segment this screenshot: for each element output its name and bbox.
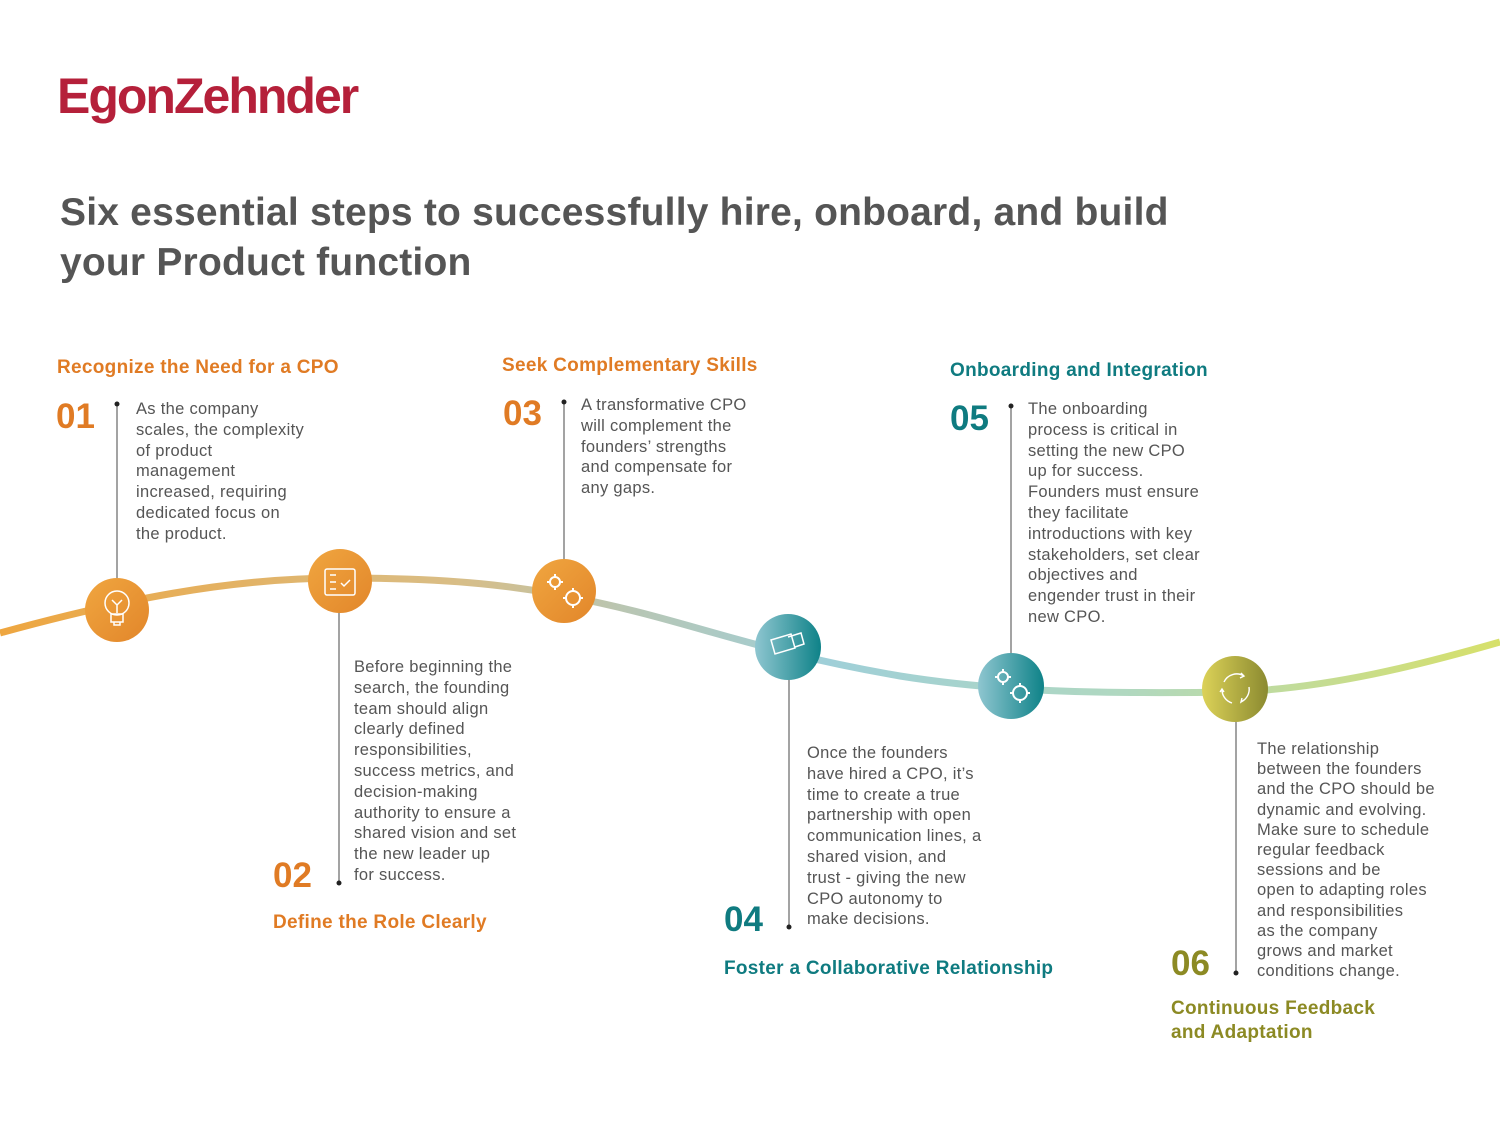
text: Foster a Collaborative Relationship	[724, 958, 1053, 979]
icon: gears teal	[978, 653, 1044, 719]
text: process is critical in	[1028, 421, 1178, 439]
text: they facilitate	[1028, 504, 1129, 522]
icon: checklist	[308, 549, 372, 613]
text: will complement the	[581, 417, 732, 435]
text: responsibilities,	[354, 741, 472, 759]
text: time to create a true	[807, 786, 960, 804]
text: shared vision, and	[807, 848, 946, 866]
text: decision-making	[354, 783, 478, 801]
text: Recognize the Need for a CPO	[57, 357, 339, 378]
text: new CPO.	[1028, 608, 1106, 626]
text: The relationship	[1257, 740, 1379, 758]
text: and compensate for	[581, 458, 732, 476]
text: of product	[136, 442, 212, 460]
title: your Product function	[60, 241, 472, 284]
text: for success.	[354, 866, 446, 884]
text: introductions with key	[1028, 525, 1192, 543]
text: dedicated focus on	[136, 504, 280, 522]
text: Continuous Feedback	[1171, 998, 1375, 1019]
text: 04	[724, 900, 763, 939]
text: up for success.	[1028, 462, 1143, 480]
text: CPO autonomy to	[807, 890, 943, 908]
text: engender trust in their	[1028, 587, 1195, 605]
text: between the founders	[1257, 760, 1422, 778]
icon: puzzle	[755, 614, 821, 680]
text: Founders must ensure	[1028, 483, 1199, 501]
text: stakeholders, set clear	[1028, 546, 1200, 564]
title: Six essential steps to successfully hire, onboard, and build	[60, 191, 1169, 234]
text: as the company	[1257, 922, 1378, 940]
text: any gaps.	[581, 479, 655, 497]
text: scales, the complexity	[136, 421, 304, 439]
text: 06	[1171, 944, 1210, 983]
text: As the company	[136, 400, 259, 418]
text: make decisions.	[807, 910, 930, 928]
text: Onboarding and Integration	[950, 360, 1208, 381]
text: 05	[950, 399, 989, 438]
text: the product.	[136, 525, 227, 543]
text: management	[136, 462, 235, 480]
step 04	[724, 744, 1053, 979]
text: 03	[503, 394, 542, 433]
logo: EgonZehnder	[57, 68, 357, 124]
text: open to adapting roles	[1257, 881, 1427, 899]
text: grows and market	[1257, 942, 1393, 960]
text: 02	[273, 856, 312, 895]
text: increased, requiring	[136, 483, 287, 501]
step 06	[1171, 740, 1435, 1043]
text: have hired a CPO, it’s	[807, 765, 974, 783]
text: conditions change.	[1257, 962, 1400, 980]
text: sessions and be	[1257, 861, 1381, 879]
text: dynamic and evolving.	[1257, 801, 1427, 819]
icon: lightbulb	[85, 578, 149, 642]
icon: gears orange	[532, 559, 596, 623]
step 05	[950, 360, 1208, 626]
text: clearly defined	[354, 720, 465, 738]
text: The onboarding	[1028, 400, 1148, 418]
text: success metrics, and	[354, 762, 514, 780]
text: authority to ensure a	[354, 804, 511, 822]
text: team should align	[354, 700, 488, 718]
text: the new leader up	[354, 845, 490, 863]
text: trust - giving the new	[807, 869, 966, 887]
text: and Adaptation	[1171, 1022, 1313, 1043]
text: A transformative CPO	[581, 396, 747, 414]
text: communication lines, a	[807, 827, 981, 845]
text: Make sure to schedule	[1257, 821, 1429, 839]
text: regular feedback	[1257, 841, 1385, 859]
text: 01	[56, 397, 95, 436]
step 03	[502, 355, 758, 497]
step 01	[56, 357, 339, 543]
icon: cycle arrows	[1202, 656, 1268, 722]
text: Before beginning the	[354, 658, 512, 676]
text: and responsibilities	[1257, 902, 1403, 920]
text: Define the Role Clearly	[273, 912, 487, 933]
text: founders’ strengths	[581, 438, 726, 456]
text: search, the founding	[354, 679, 510, 697]
step 02	[273, 658, 516, 933]
text: partnership with open	[807, 806, 971, 824]
text: and the CPO should be	[1257, 780, 1435, 798]
text: setting the new CPO	[1028, 442, 1185, 460]
text: objectives and	[1028, 566, 1138, 584]
text: Once the founders	[807, 744, 948, 762]
text: Seek Complementary Skills	[502, 355, 758, 376]
title	[60, 191, 1169, 284]
text: shared vision and set	[354, 824, 516, 842]
